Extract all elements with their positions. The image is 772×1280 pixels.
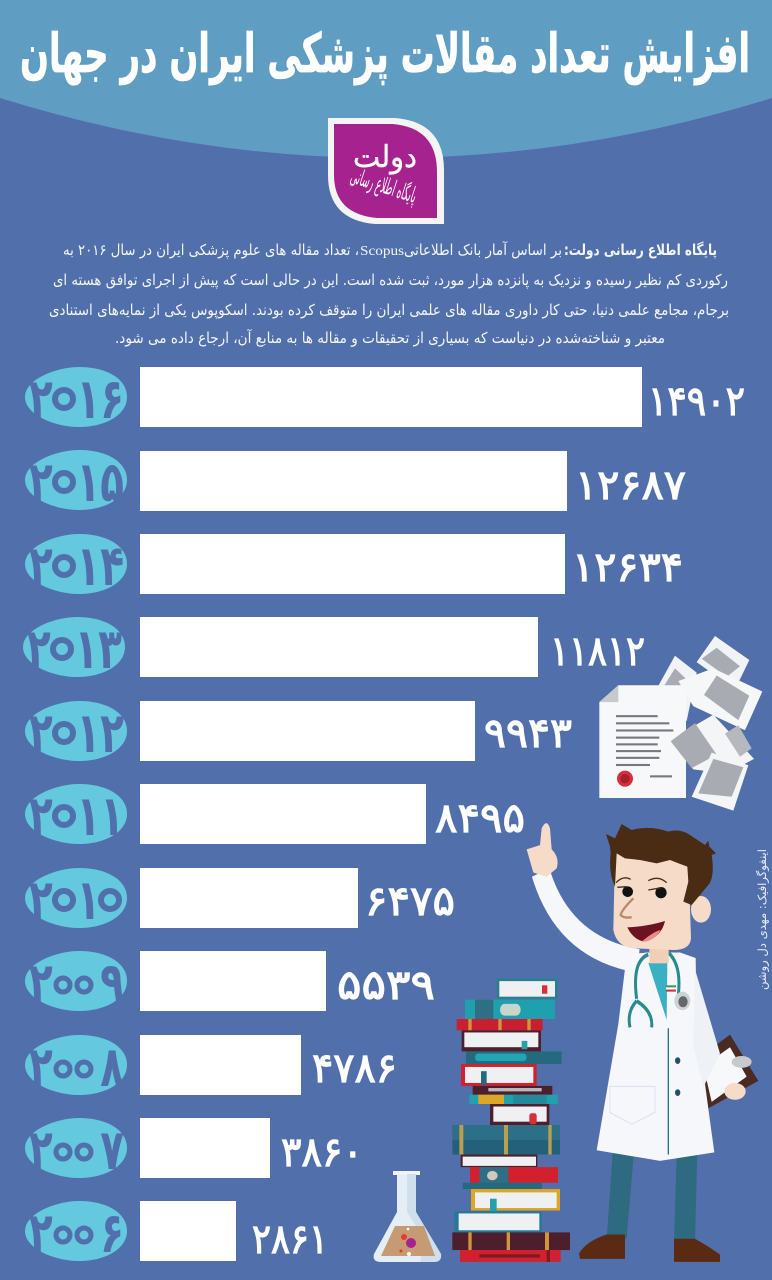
logo: دولت bbox=[353, 140, 417, 175]
row 2007: ۳۸۶۰ bbox=[281, 1128, 363, 1176]
row 2014 bbox=[25, 534, 683, 599]
intro text: پایگاه اطلاع رسانی دولت: bbox=[564, 241, 717, 260]
credit: اینفوگرافیک: مهدی دل روشن bbox=[755, 849, 770, 990]
doctor head bbox=[606, 824, 716, 963]
row 2008: ۴۷۸۶ bbox=[312, 1044, 397, 1092]
row 2015: ۲۰۱۵ bbox=[29, 450, 124, 515]
row 2008 bbox=[25, 1035, 397, 1100]
row 2006: ۲۰۰۶ bbox=[29, 1201, 124, 1266]
intro text: معتبر و شناخته‌شده در دنیاست که بسیاری از تحقیقات و مقاله ها به منابع آن، ارجاع داده می شود. bbox=[115, 329, 665, 347]
row 2010: ۲۰۱۰ bbox=[29, 868, 124, 933]
row 2012 bbox=[25, 701, 572, 766]
row 2008: ۲۰۰۸ bbox=[29, 1035, 124, 1100]
row 2012: ۲۰۱۲ bbox=[29, 701, 124, 766]
row 2014: ۱۲۶۳۴ bbox=[572, 543, 683, 591]
illustration: papers, books, doctor bbox=[452, 636, 762, 1262]
row 2010: ۶۴۷۵ bbox=[365, 877, 455, 925]
row 2011: ۸۴۹۵ bbox=[435, 794, 525, 842]
header cap bbox=[0, 0, 772, 158]
intro text bbox=[49, 241, 729, 347]
icon: papers bbox=[599, 636, 762, 811]
row 2009: ۲۰۰۹ bbox=[29, 951, 124, 1016]
row 2016: ۲۰۱۶ bbox=[29, 367, 124, 432]
row 2006 bbox=[25, 1201, 328, 1266]
row 2011 bbox=[25, 784, 525, 849]
row 2015 bbox=[25, 450, 686, 515]
row 2013: ۲۰۱۳ bbox=[27, 617, 122, 682]
row 2014: ۲۰۱۴ bbox=[29, 534, 124, 599]
bar chart bbox=[23, 367, 745, 1266]
icon: books bbox=[452, 979, 570, 1262]
row 2010 bbox=[25, 868, 455, 933]
row 2012: ۹۹۴۳ bbox=[484, 709, 572, 757]
row 2006: ۲۸۶۱ bbox=[252, 1215, 328, 1263]
intro text: ، تعداد مقاله های علوم پزشکی ایران در سال ۲۰۱۶ به bbox=[63, 241, 359, 260]
intro text: بر اساس آمار بانک اطلاعاتی bbox=[404, 241, 562, 259]
row 2016: ۱۴۹۰۲ bbox=[648, 377, 745, 425]
row 2016 bbox=[25, 367, 745, 432]
logo: پایگاه اطلاع رسانی bbox=[347, 163, 420, 209]
row 2009 bbox=[25, 951, 435, 1016]
row 2015: ۱۲۶۸۷ bbox=[575, 461, 686, 509]
row 2013: ۱۱۸۱۲ bbox=[550, 627, 645, 675]
row 2009: ۵۵۳۹ bbox=[337, 961, 435, 1009]
row 2011: ۲۰۱۱ bbox=[29, 784, 124, 849]
row 2007: ۲۰۰۷ bbox=[29, 1118, 124, 1183]
logo bbox=[328, 118, 444, 224]
doctor body bbox=[527, 823, 758, 1262]
row 2007 bbox=[25, 1118, 363, 1183]
intro text: Scopus bbox=[360, 244, 404, 259]
icon: flask bbox=[374, 1171, 441, 1262]
row 2013 bbox=[23, 617, 645, 682]
